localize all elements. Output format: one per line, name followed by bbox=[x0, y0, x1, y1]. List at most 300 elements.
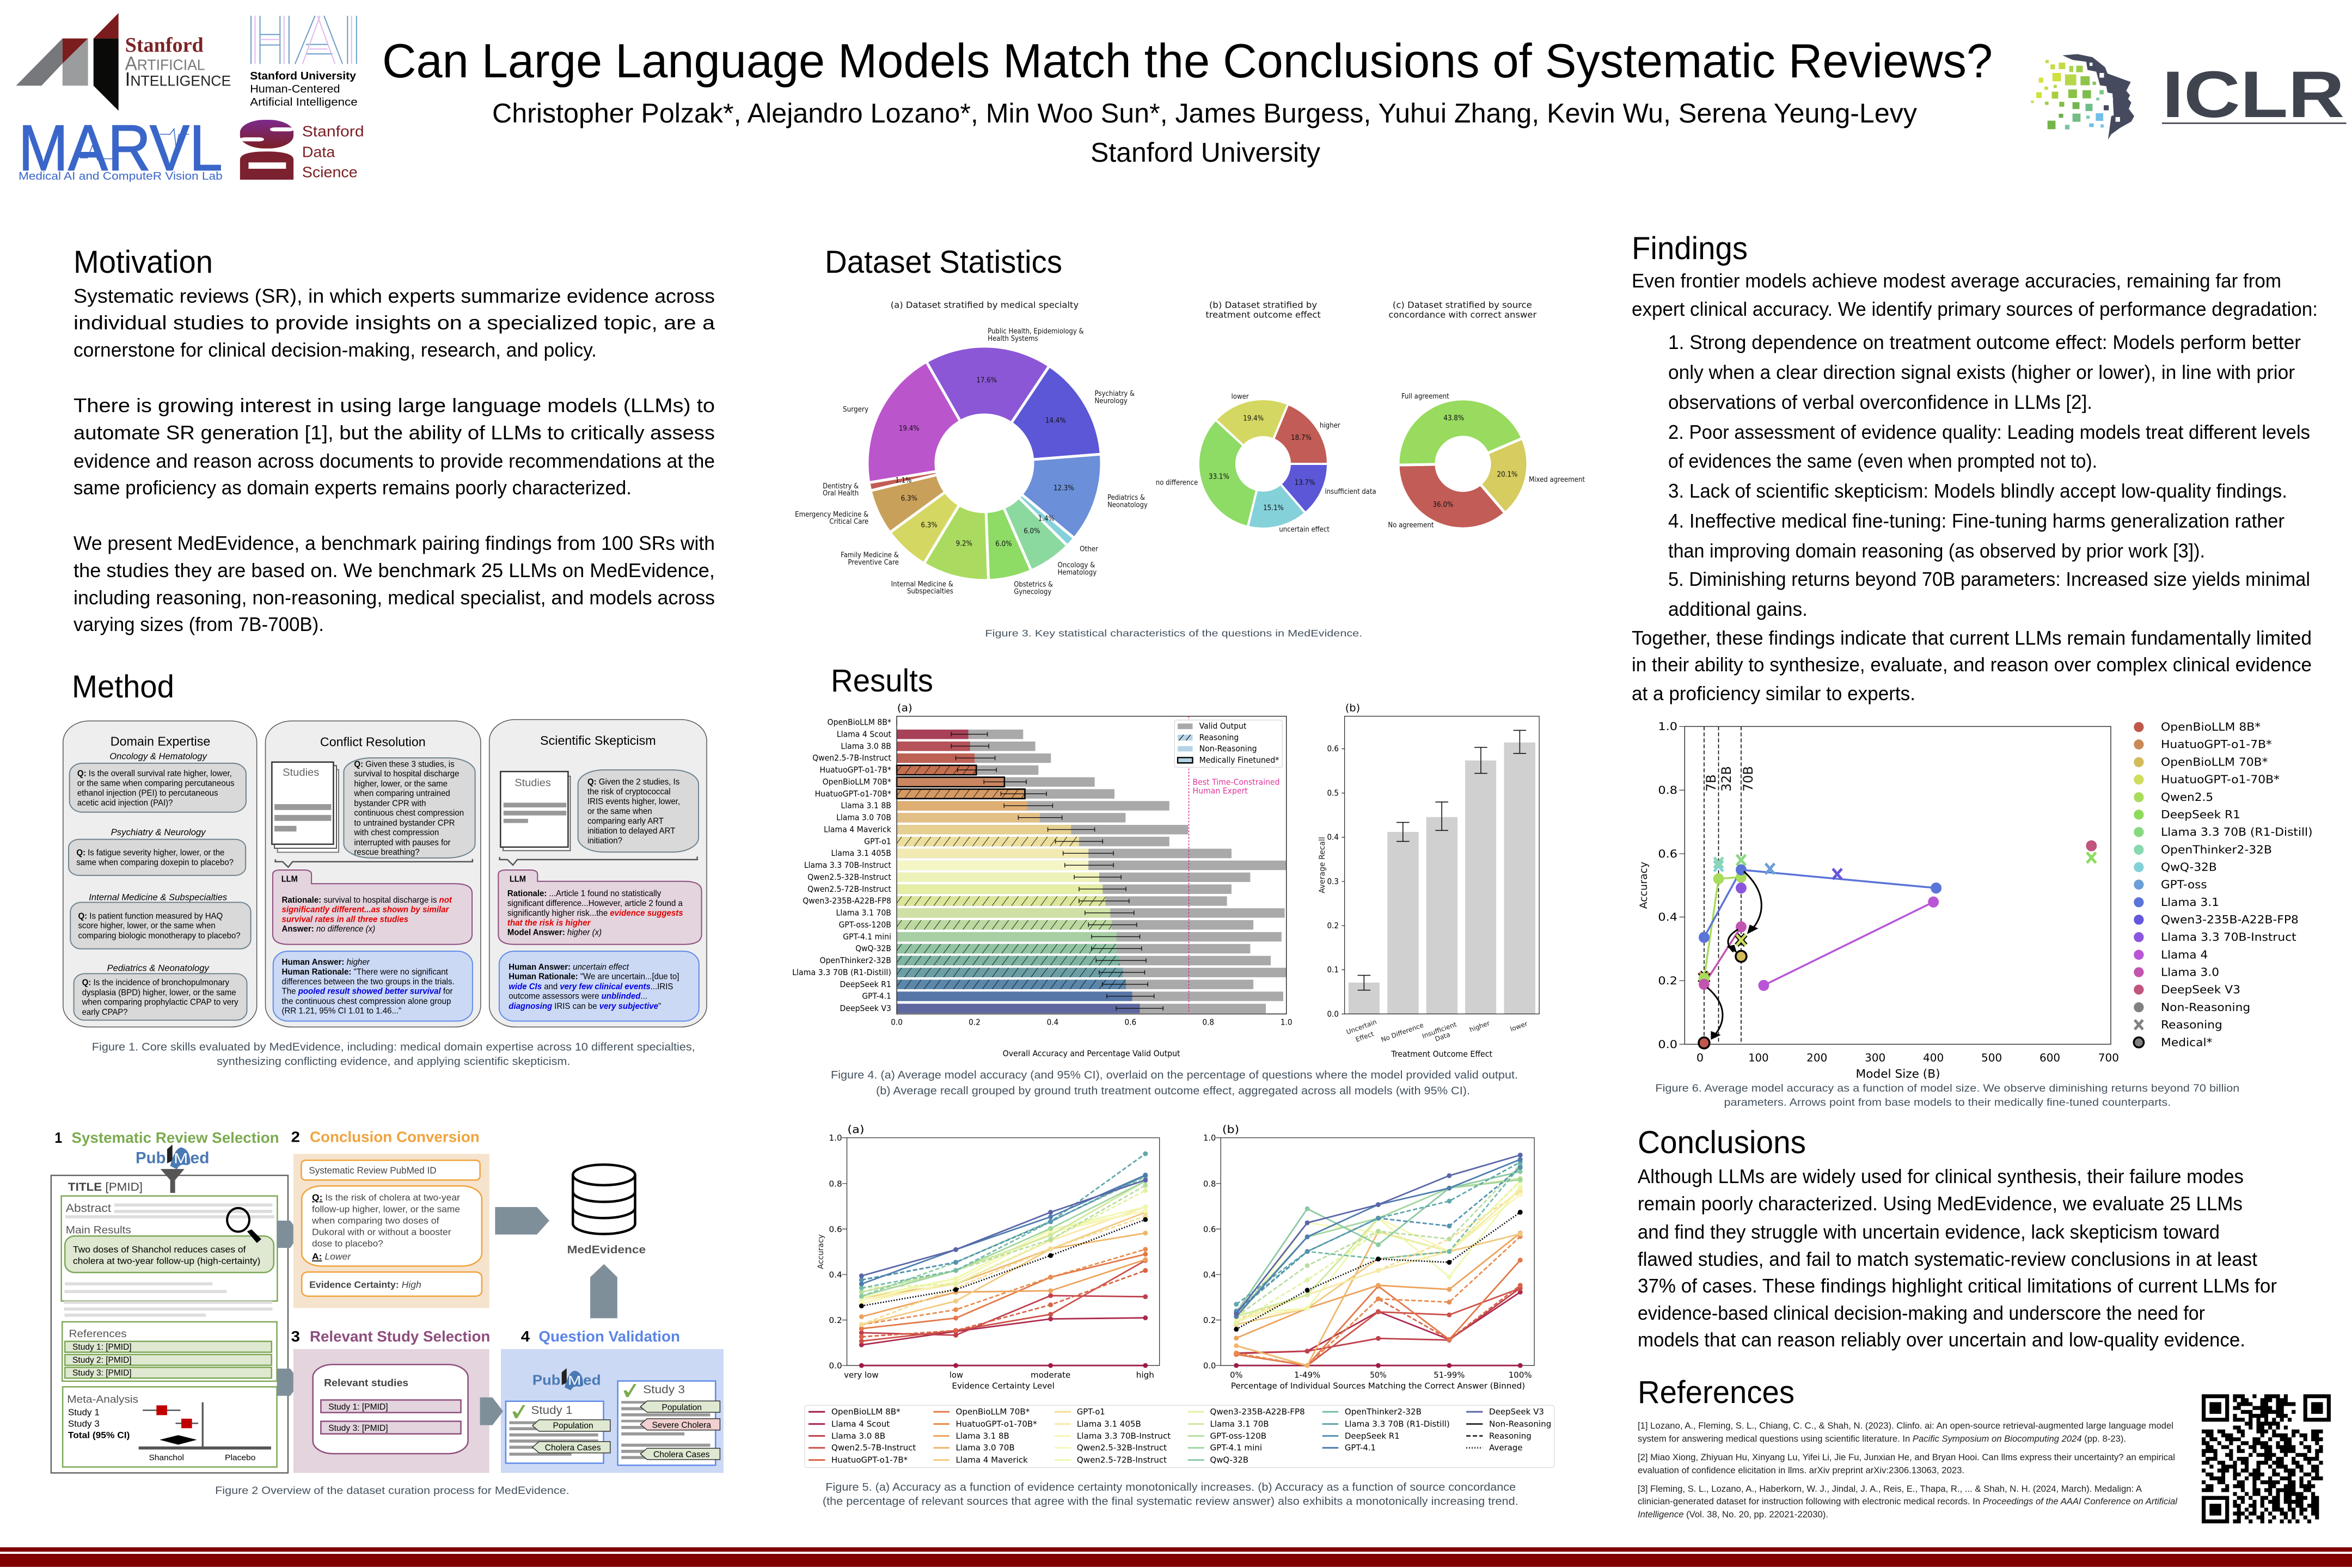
panel: scientific skepticism: the risk of cryptococcal bbox=[587, 787, 671, 797]
x axis ticks and title: 0.8 bbox=[1202, 1018, 1214, 1027]
model labels: GPT-o1 bbox=[864, 837, 891, 846]
labels: concordance slices: 20.1% bbox=[1497, 470, 1517, 479]
panel: scientific skepticism: Human Rationale: "We are uncertain...[due to] bbox=[509, 971, 679, 981]
panel: systematic review selection bbox=[51, 1130, 288, 1473]
chart: accuracy vs evidence certainty: low bbox=[950, 1370, 963, 1380]
chart titles bbox=[891, 301, 1537, 320]
panel: conclusion conversion bbox=[291, 1129, 489, 1308]
axis labels: recall chart: No Difference bbox=[1380, 1021, 1425, 1044]
text block: reference list: [1] Lozano, A., Fleming, S. L., Chiang, C. C., & Shah, N. (2023). Clinfo. ai: An open-source retrieval-augmented large language model bbox=[1638, 1420, 2173, 1431]
legend: figure 5 models: HuatuoGPT-o1-70B* bbox=[956, 1419, 1037, 1429]
logo: Stanford Data Science: Data bbox=[302, 144, 335, 161]
text: Science bbox=[302, 164, 358, 181]
text block: motivation body: individual studies to provide insights on a specialized topic, are a bbox=[74, 311, 715, 334]
chart: accuracy vs source concordance: 0% bbox=[1230, 1370, 1242, 1380]
labels: specialty slices: Oral Health bbox=[823, 489, 859, 498]
figure 3 labels: Neonatology bbox=[1107, 501, 1148, 509]
card: study 3 bbox=[618, 1381, 720, 1465]
text block: motivation body: automate SR generation [1], but the ability of LLMs to critically assess bbox=[74, 421, 715, 444]
text block: motivation body: same proficiency as domain experts remains poorly characterized. bbox=[74, 476, 632, 499]
card: study 3: Cholera Cases bbox=[653, 1449, 710, 1459]
legend: figure 5 models: Llama 4 Scout bbox=[831, 1419, 890, 1429]
model labels: Llama 3.0 70B bbox=[836, 813, 891, 823]
labels: outcome slices bbox=[1156, 393, 1376, 534]
x ticks: 0 bbox=[1696, 1052, 1704, 1064]
chart: donut c source concordance bbox=[1398, 399, 1528, 529]
bars: medically fine-tuned outline bbox=[897, 765, 1025, 799]
legend: figure 5 models: DeepSeek R1 bbox=[1345, 1431, 1400, 1441]
legend: figure 5 models bbox=[805, 1405, 1554, 1468]
text block: conclusions body: flawed studies, and fail to match systematic-review conclusions in at least bbox=[1638, 1248, 2257, 1270]
panel: scientific skepticism: diagnosing IRIS can be very subjective" bbox=[509, 1001, 661, 1010]
labels: concordance slices: No agreement bbox=[1388, 521, 1434, 529]
labels: specialty slices: 6.0% bbox=[995, 540, 1012, 548]
panel: scientific skepticism: Scientific Skepticism bbox=[540, 734, 656, 748]
annotations: size guides and y axis label: Accuracy bbox=[1638, 862, 1650, 909]
figure 4b: average recall bar chart: 0.0 bbox=[1327, 1010, 1339, 1019]
chart: accuracy vs evidence certainty: 0.4 bbox=[829, 1270, 842, 1280]
icon: magnifying glass bbox=[227, 1208, 261, 1243]
chart: accuracy vs source concordance: Percentage of Individual Sources Matching the Correct Answer (Binned) bbox=[1231, 1381, 1525, 1391]
figure 3 labels: (c) Dataset stratified by source bbox=[1393, 301, 1532, 310]
chart: forest plot bbox=[139, 1402, 271, 1462]
chart: donut b treatment outcome bbox=[1198, 399, 1328, 529]
text: Stanford University bbox=[250, 70, 356, 82]
legend: figure 6 models: Llama 3.1 bbox=[2161, 896, 2219, 909]
logo: ICLR bbox=[2031, 54, 2346, 140]
figure 1: core skills panels bbox=[63, 720, 707, 1068]
x axis ticks and title: 1.0 bbox=[1281, 1018, 1293, 1027]
panel: conflict resolution: with chest compression bbox=[354, 828, 439, 837]
text block: conclusions body: remain poorly characterized. Using MedEvidence, we evaluate 25 LLMs bbox=[1638, 1192, 2243, 1215]
labels: specialty slices: Health Systems bbox=[988, 334, 1038, 342]
panel: relevant study selection: Study 3: [PMID] bbox=[328, 1423, 388, 1433]
panel: scientific skepticism: Q: Given the 2 studies, Is bbox=[587, 777, 679, 786]
labels: outcome slices: higher bbox=[1320, 421, 1340, 430]
panel: scientific skepticism: Rationale: ...Article 1 found no statistically bbox=[507, 889, 661, 898]
chart: accuracy vs evidence certainty bbox=[829, 1123, 1160, 1391]
labels: specialty slices: Surgery bbox=[843, 406, 868, 413]
figure 3 labels bbox=[795, 301, 1585, 639]
y ticks: 1.0 bbox=[1658, 721, 1677, 733]
chart titles: (b) Dataset stratified by bbox=[1209, 301, 1317, 310]
legend: figure 5 models: Llama 3.0 70B bbox=[956, 1443, 1015, 1453]
labels: specialty slices: Critical Care bbox=[829, 517, 868, 525]
text block: findings body: observations of verbal overconfidence in LLMs [2]. bbox=[1668, 391, 2092, 413]
panel: conflict resolution: to untrained bystander CPR bbox=[354, 818, 455, 828]
icon: PubMed logo: M bbox=[174, 1150, 188, 1166]
model labels: HuatuoGPT-o1-7B* bbox=[820, 765, 891, 775]
legend: figure 6 models: Non-Reasoning bbox=[2161, 1001, 2250, 1014]
figure 4b: average recall bar chart: 0.4 bbox=[1327, 834, 1339, 842]
text: Stanford bbox=[302, 124, 364, 140]
axis labels: recall chart: Effect bbox=[1355, 1030, 1375, 1044]
labels: concordance slices bbox=[1388, 393, 1585, 529]
axis labels: recall chart: Uncertain bbox=[1345, 1018, 1377, 1036]
authors: Christopher Polzak*, Alejandro Lozano*, Min Woo Sun*, James Burgess, Yuhui Zhang, Kevin Wu, Serena Yeung-Levy bbox=[492, 98, 1917, 128]
panel: systematic review selection: Study 1: [PMID] bbox=[72, 1342, 132, 1351]
panel: conflict resolution: bystander CPR with bbox=[354, 798, 426, 808]
x ticks: 600 bbox=[2039, 1052, 2060, 1064]
labels: outcome slices: 33.1% bbox=[1209, 473, 1229, 481]
model labels bbox=[792, 718, 891, 1013]
chart: accuracy vs source concordance: 1.0 bbox=[1203, 1133, 1216, 1143]
chart: accuracy vs source concordance: 0.4 bbox=[1203, 1270, 1216, 1280]
panel: domain expertise: dysplasia (BPD) higher, lower, or the same bbox=[82, 988, 236, 997]
model labels: Llama 4 Scout bbox=[837, 730, 891, 739]
legend: figure 5 models: Llama 3.3 70B-Instruct bbox=[1077, 1431, 1171, 1441]
caption: figure 2: Figure 2 Overview of the dataset curation process for MedEvidence. bbox=[215, 1484, 569, 1496]
figure 5: accuracy line charts bbox=[805, 1123, 1554, 1508]
model labels: GPT-4.1 bbox=[862, 992, 891, 1001]
x ticks: 700 bbox=[2098, 1052, 2119, 1064]
icon: PubMed logo: Pub bbox=[136, 1149, 166, 1167]
legend: figure 6 models: QwQ-32B bbox=[2161, 860, 2217, 874]
labels: specialty slices: 1.1% bbox=[895, 476, 911, 485]
text block: conclusions body bbox=[1638, 1165, 2277, 1351]
legend: figure 5 models: Qwen2.5-32B-Instruct bbox=[1077, 1443, 1167, 1453]
text block: findings body: 4. Ineffective medical fine-tuning: Fine-tuning harms generalization rather bbox=[1668, 510, 2284, 532]
model labels: HuatuoGPT-o1-70B* bbox=[815, 789, 891, 799]
text block: reference list: [2] Miao Xiong, Zhiyuan Hu, Xinyang Lu, Yifei Li, Jie Fu, Junxian He, and Bryan Hooi. Can llms express their uncertainty? an empirical bbox=[1638, 1452, 2175, 1462]
legend: Non-Reasoning bbox=[1199, 744, 1257, 754]
labels: specialty slices: Family Medicine & bbox=[841, 551, 899, 559]
legend: figure 6 models: HuatuoGPT-o1-7B* bbox=[2161, 738, 2272, 751]
text block: motivation body: cornerstone for clinical decision-making, research, and policy. bbox=[74, 339, 597, 361]
panel: systematic review selection: 1 bbox=[54, 1130, 62, 1146]
labels: specialty slices: Neurology bbox=[1094, 397, 1128, 405]
panel: domain expertise: when comparing prophylactic CPAP to very bbox=[82, 997, 238, 1007]
model labels: GPT-4.1 mini bbox=[843, 932, 891, 941]
annotations: size guides and y axis label: 70B bbox=[1741, 766, 1756, 792]
labels: specialty slices: 14.4% bbox=[1045, 416, 1066, 425]
panel: relevant study selection: Relevant Study Selection bbox=[310, 1328, 490, 1345]
panel: relevant study selection: Study 1: [PMID] bbox=[328, 1401, 388, 1411]
panel: scientific skepticism: significantly higher risk...the evidence suggests bbox=[507, 908, 683, 917]
model labels: Qwen2.5-72B-Instruct bbox=[807, 885, 891, 894]
icon: PubMed logo small: M bbox=[568, 1374, 581, 1388]
card: study 3: Severe Cholera bbox=[652, 1419, 711, 1430]
panel: scientific skepticism: Studies bbox=[514, 777, 551, 788]
x ticks bbox=[1696, 1052, 2119, 1081]
text: Artificial Intelligence bbox=[250, 96, 358, 108]
legend: figure 5 models: Llama 3.0 8B bbox=[831, 1431, 885, 1441]
panel: conclusion conversion: when comparing two doses of bbox=[311, 1216, 439, 1226]
model labels: Llama 3.1 405B bbox=[831, 849, 891, 858]
legend: figure 5 models: OpenBioLLM 8B* bbox=[831, 1407, 901, 1417]
chart: accuracy vs source concordance: 50% bbox=[1370, 1370, 1387, 1380]
legend: figure 6 models: Medical* bbox=[2161, 1036, 2213, 1049]
panel: conclusion conversion: follow-up higher, lower, or the same bbox=[312, 1204, 460, 1215]
x axis ticks and title: 0.0 bbox=[891, 1018, 903, 1027]
bars: reasoning hatch overlay bbox=[897, 765, 1126, 989]
model labels: GPT-oss-120B bbox=[839, 920, 891, 930]
panel: systematic review selection: TITLE [PMID] bbox=[68, 1180, 143, 1193]
caption: figure 1: synthesizing conflicting evidence, and applying scientific skepticism. bbox=[217, 1056, 570, 1068]
legend: figure 6 models: OpenThinker2-32B bbox=[2161, 843, 2272, 856]
figure 3 labels: insufficient data bbox=[1325, 488, 1376, 496]
annotation: best human expert: Best Time-Constrained bbox=[1193, 777, 1280, 787]
panel: relevant study selection bbox=[291, 1328, 490, 1473]
caption: figure 3: Figure 3. Key statistical characteristics of the questions in MedEvidence. bbox=[985, 628, 1362, 639]
panel: conflict resolution: Answer: no difference (x) bbox=[282, 924, 375, 934]
heading: Conclusions: Conclusions bbox=[1638, 1125, 1806, 1160]
panel: conclusions bbox=[1638, 1125, 2277, 1351]
text block: findings body: Even frontier models achieve modest average accuracies, remaining far from bbox=[1632, 270, 2281, 292]
caption: figure 5 bbox=[823, 1481, 1518, 1508]
panel: domain expertise: Pediatrics & Neonatology bbox=[107, 963, 210, 973]
model labels: OpenBioLLM 8B* bbox=[828, 718, 891, 727]
panel: systematic review selection: Main Results bbox=[66, 1224, 131, 1236]
x axis ticks and title: 0.4 bbox=[1047, 1018, 1058, 1027]
icon: MedEvidence database: MedEvidence bbox=[567, 1244, 646, 1256]
labels: concordance slices: Full agreement bbox=[1401, 393, 1449, 400]
chart: accuracy vs source concordance: 100% bbox=[1509, 1370, 1532, 1380]
annotations: size guides and y axis label bbox=[1638, 766, 1756, 909]
model labels: Qwen3-235B-A22B-FP8 bbox=[803, 897, 891, 906]
card: study 1: Population bbox=[553, 1420, 593, 1430]
figure 4a: accuracy bar chart bbox=[792, 702, 1293, 1058]
panel: conclusion conversion: Dukoral with or without a booster bbox=[312, 1227, 451, 1238]
figure 3 labels: concordance with correct answer bbox=[1388, 310, 1537, 320]
x ticks: Model Size (B) bbox=[1856, 1067, 1940, 1081]
axis labels: recall chart: lower bbox=[1509, 1020, 1528, 1033]
footer bar bbox=[0, 1547, 2352, 1567]
panel: conflict resolution: (RR 1.21, 95% CI 1.01 to 1.46..." bbox=[282, 1006, 401, 1015]
figure 4b: average recall bar chart: (b) bbox=[1345, 702, 1360, 714]
x axis ticks and title: 0.2 bbox=[969, 1018, 981, 1027]
card: study 1: Study 1 bbox=[531, 1404, 572, 1417]
panel: conflict resolution: the continuous chest compression alone group bbox=[282, 996, 451, 1006]
x axis ticks and title bbox=[891, 1018, 1293, 1058]
labels: specialty slices bbox=[795, 327, 1148, 596]
panel: scientific skepticism: comparing early ART bbox=[587, 816, 664, 825]
figure 2: dataset curation process bbox=[51, 1129, 724, 1496]
legend: figure 6 models: HuatuoGPT-o1-70B* bbox=[2161, 773, 2280, 786]
icon: PubMed logo small: ed bbox=[583, 1373, 601, 1388]
text block: reference list: evaluation of confidence elicitation in llms. arXiv preprint arXiv:2306.13063, 2023. bbox=[1638, 1465, 1964, 1475]
panel: conflict resolution: Human Answer: higher bbox=[282, 957, 370, 966]
panel: conflict resolution: when comparing untrained bbox=[354, 788, 450, 798]
caption: figure 4: Figure 4. (a) Average model accuracy (and 95% CI), overlaid on the percentage of questions where the model provided valid output. bbox=[831, 1069, 1518, 1081]
panel: references bbox=[1638, 1375, 2178, 1520]
panel: findings bbox=[1632, 231, 2318, 705]
panel: domain expertise: Q: Is patient function measured by HAQ bbox=[78, 911, 223, 921]
chart: accuracy vs source concordance bbox=[1203, 1123, 1534, 1391]
text block: conclusions body: and find they struggle with uncertain evidence, lack skepticism toward bbox=[1638, 1221, 2220, 1243]
panel: systematic review selection: References bbox=[69, 1328, 127, 1339]
title: Can Large Language Models Match the Conclusions of Systematic Reviews? bbox=[382, 34, 1993, 88]
text block: findings body: 3. Lack of scientific skepticism: Models blindly accept low-quality findings. bbox=[1668, 480, 2287, 502]
panel: conflict resolution: higher, lower, or the same bbox=[354, 779, 448, 788]
logo: MARVL lab bbox=[19, 112, 223, 184]
logos: Stanford AI, HAI, MARVL, Stanford Data Science: Stanford bbox=[125, 33, 204, 57]
panel: conflict resolution: LLM bbox=[281, 874, 298, 884]
reference lines bbox=[1704, 726, 1741, 1044]
arrow: to conclusion conversion bbox=[277, 1221, 300, 1248]
legend: figure 5 models: HuatuoGPT-o1-7B* bbox=[831, 1455, 908, 1465]
heading: Results: Results bbox=[831, 663, 933, 699]
legend: figure 6 models: Llama 3.0 bbox=[2161, 965, 2219, 978]
figure 4b: average recall bar chart: Treatment Outcome Effect bbox=[1391, 1050, 1492, 1059]
labels: specialty slices: Oncology & bbox=[1058, 561, 1095, 569]
panel: scientific skepticism: initiation to delayed ART bbox=[587, 826, 675, 836]
panel: domain expertise: score higher, lower, or the same when bbox=[78, 921, 216, 930]
icon: QR code bbox=[2202, 1394, 2331, 1523]
x axis ticks and title: Overall Accuracy and Percentage Valid Output bbox=[1003, 1049, 1180, 1058]
annotations: size guides and y axis label: 32B bbox=[1719, 766, 1734, 792]
chart: accuracy vs source concordance: 1-49% bbox=[1294, 1370, 1320, 1380]
panel: conflict resolution: Conflict Resolution bbox=[320, 735, 426, 749]
labels: specialty slices: 6.3% bbox=[901, 494, 917, 503]
icon: funnel bbox=[161, 1169, 185, 1193]
axis labels: recall chart: Average Recall bbox=[1318, 837, 1327, 893]
legend: figure 5 models: OpenThinker2-32B bbox=[1345, 1407, 1422, 1417]
legend: figure 6 models: Reasoning bbox=[2161, 1018, 2222, 1031]
panel: scientific skepticism: significant difference...However, article 2 found a bbox=[507, 898, 683, 908]
legend: figure 5 models: Llama 3.3 70B (R1-Distill) bbox=[1345, 1419, 1450, 1429]
caption: figure 6 bbox=[1655, 1082, 2239, 1108]
icon: PubMed logo small: Pub bbox=[532, 1373, 560, 1388]
text block: reference list bbox=[1638, 1420, 2178, 1520]
panel: conclusion conversion: A: Lower bbox=[312, 1252, 351, 1262]
axis labels: recall chart bbox=[1318, 837, 1528, 1044]
caption: figure 5: Figure 5. (a) Accuracy as a function of evidence certainty monotonically increases. (b) Accuracy as a function of source concordance bbox=[825, 1481, 1516, 1493]
logo: Stanford HAI bbox=[250, 16, 358, 108]
labels: specialty slices: Other bbox=[1080, 545, 1098, 553]
text block: findings body bbox=[1632, 270, 2318, 705]
arrow: to database bbox=[495, 1207, 549, 1234]
panel: scientific skepticism: IRIS events higher, lower, bbox=[587, 797, 680, 806]
legend: figure 6 models: OpenBioLLM 70B* bbox=[2161, 755, 2268, 769]
heading: References: References bbox=[1638, 1375, 1794, 1410]
text block: motivation body bbox=[74, 285, 715, 635]
heading: Motivation: Motivation bbox=[74, 244, 213, 280]
icon: MedEvidence database bbox=[567, 1165, 646, 1256]
chart: accuracy vs evidence certainty: very low bbox=[844, 1370, 879, 1380]
figure 4a: accuracy bar chart: (a) bbox=[897, 702, 912, 714]
legend: figure 6 models: Qwen2.5 bbox=[2161, 791, 2213, 804]
panel: conclusion conversion: dose to placebo? bbox=[312, 1239, 383, 1249]
panel: systematic review selection: Two doses of Shanchol reduces cases of bbox=[73, 1245, 246, 1255]
panel: domain expertise: acetic acid injection (PAI)? bbox=[77, 798, 173, 807]
panel: conclusion conversion: 2 bbox=[291, 1129, 300, 1146]
card: study 3: Population bbox=[661, 1402, 702, 1412]
labels: specialty slices: 9.2% bbox=[956, 540, 972, 548]
labels: concordance slices: 43.8% bbox=[1443, 414, 1464, 422]
logo: Stanford Artificial Intelligence bbox=[16, 13, 231, 111]
model labels: Qwen2.5-32B-Instruct bbox=[807, 873, 891, 882]
logos: Stanford AI, HAI, MARVL, Stanford Data Science: Medical AI and ComputeR Vision Lab bbox=[19, 170, 223, 182]
connecting lines bbox=[1704, 870, 1936, 985]
labels: specialty slices: Gynecology bbox=[1014, 588, 1051, 596]
chart: accuracy vs evidence certainty: 0.2 bbox=[829, 1315, 842, 1325]
caption: figure 1: Figure 1. Core skills evaluated by MedEvidence, including: medical domain expertise across 10 different specialties, bbox=[92, 1041, 695, 1053]
panel: conclusion conversion: Systematic Review PubMed ID bbox=[309, 1165, 437, 1176]
labels: specialty slices: Public Health, Epidemiology & bbox=[988, 327, 1084, 335]
annotation: best human expert bbox=[1193, 777, 1280, 796]
text: Mixed agreement bbox=[1529, 475, 1585, 483]
panel: scientific skepticism: Human Answer: uncertain effect bbox=[509, 962, 629, 971]
legend: figure 6 models: DeepSeek R1 bbox=[2161, 808, 2240, 821]
reasoning markers bbox=[1700, 853, 2096, 983]
labels: specialty slices: 1.4% bbox=[1038, 514, 1055, 523]
x ticks: 100 bbox=[1748, 1052, 1769, 1064]
legend: figure 6 models: GPT-oss bbox=[2161, 878, 2207, 891]
logo: Stanford Artificial Intelligence: ARTIFICIAL bbox=[125, 53, 205, 74]
y ticks: 0.4 bbox=[1658, 911, 1677, 923]
x ticks: 500 bbox=[1981, 1052, 2002, 1064]
labels: specialty slices: Subspecialties bbox=[907, 587, 953, 596]
x ticks: 200 bbox=[1806, 1052, 1827, 1064]
labels: specialty slices: 6.3% bbox=[921, 521, 938, 529]
panel: relevant study selection: 3 bbox=[291, 1328, 300, 1345]
arrows: base to medically tuned bbox=[1707, 872, 1761, 1040]
axis label: figure 5 accuracy: Accuracy bbox=[817, 1234, 825, 1269]
model labels: DeepSeek R1 bbox=[840, 980, 891, 989]
panel: conflict resolution: survival to hospital discharge bbox=[354, 769, 459, 779]
text block: conclusions body: 37% of cases. These findings highlight critical limitations of current LLMs for bbox=[1638, 1275, 2277, 1297]
text block: findings body: expert clinical accuracy. We identify primary sources of performance degradation: bbox=[1632, 298, 2318, 320]
labels: outcome slices: lower bbox=[1232, 393, 1249, 401]
chart: accuracy vs evidence certainty: 0.8 bbox=[829, 1179, 842, 1189]
labels: specialty slices: 6.0% bbox=[1024, 527, 1040, 535]
caption: figure 5: (the percentage of relevant sources that agree with the final systematic review answer) also exhibits a monotonically increasing trend. bbox=[823, 1496, 1518, 1508]
caption: figure 4 bbox=[831, 1069, 1518, 1097]
heading: Method: Method bbox=[72, 669, 174, 705]
legend: figure 5 models: Llama 3.1 70B bbox=[1210, 1419, 1269, 1429]
labels: outcome slices: uncertain effect bbox=[1279, 525, 1330, 534]
panel: systematic review selection: Total (95% CI) bbox=[68, 1430, 130, 1441]
axis labels: recall chart: Data bbox=[1434, 1031, 1451, 1043]
panel: domain expertise: Internal Medicine & Subspecialties bbox=[89, 892, 227, 903]
panel: conflict resolution: interrupted with pauses for bbox=[354, 837, 451, 847]
panel: scientific skepticism: that the risk is higher bbox=[507, 918, 591, 927]
panel: conflict resolution: Q: Given these 3 studies, is bbox=[354, 759, 455, 769]
panel: systematic review selection: Abstract bbox=[66, 1202, 111, 1215]
icon: PubMed logo small bbox=[532, 1368, 601, 1391]
panel: domain expertise bbox=[63, 721, 257, 1027]
chart: accuracy vs source concordance: 0.0 bbox=[1203, 1361, 1216, 1371]
y ticks: 0.2 bbox=[1658, 975, 1677, 987]
panel: conclusion conversion: Evidence Certainty: High bbox=[309, 1279, 421, 1290]
legend: figure 6 models: DeepSeek V3 bbox=[2161, 983, 2240, 996]
y ticks: 0.6 bbox=[1658, 848, 1677, 860]
panel: conflict resolution: continuous chest compression bbox=[354, 808, 464, 818]
text block: findings body: only when a clear direction signal exists (higher or lower), in line with prior bbox=[1668, 361, 2295, 383]
model labels: Llama 4 Maverick bbox=[824, 825, 891, 835]
affiliation: Stanford University bbox=[1091, 137, 1320, 168]
legend: figure 5 models: QwQ-32B bbox=[1210, 1455, 1248, 1465]
labels: outcome slices: 18.7% bbox=[1291, 434, 1312, 442]
panel: domain expertise: comparing biologic monotherapy to placebo? bbox=[78, 930, 241, 940]
panel: conclusion conversion: Q: Is the risk of cholera at two-year bbox=[312, 1192, 460, 1203]
legend: figure 6 models: OpenBioLLM 8B* bbox=[2161, 720, 2261, 733]
panel: conflict resolution bbox=[265, 721, 481, 1027]
chart: accuracy vs source concordance: 0.2 bbox=[1203, 1315, 1216, 1325]
annotations: size guides and y axis label: 7B bbox=[1704, 774, 1719, 792]
panel: conclusion conversion: Conclusion Conversion bbox=[310, 1129, 480, 1146]
labels: specialty slices: 17.6% bbox=[976, 376, 997, 384]
icon: PubMed logo bbox=[136, 1144, 209, 1169]
text block: findings body: at a proficiency similar to experts. bbox=[1632, 682, 1915, 705]
x ticks: 300 bbox=[1865, 1052, 1885, 1064]
figure 3 labels: Pediatrics & bbox=[1107, 494, 1145, 502]
legend: figure 5 models: GPT-4.1 mini bbox=[1210, 1443, 1262, 1453]
chart: forest plot: Placebo bbox=[225, 1453, 255, 1462]
caption: figure 1 bbox=[92, 1041, 695, 1068]
panel: question validation: Question Validation bbox=[538, 1328, 680, 1345]
